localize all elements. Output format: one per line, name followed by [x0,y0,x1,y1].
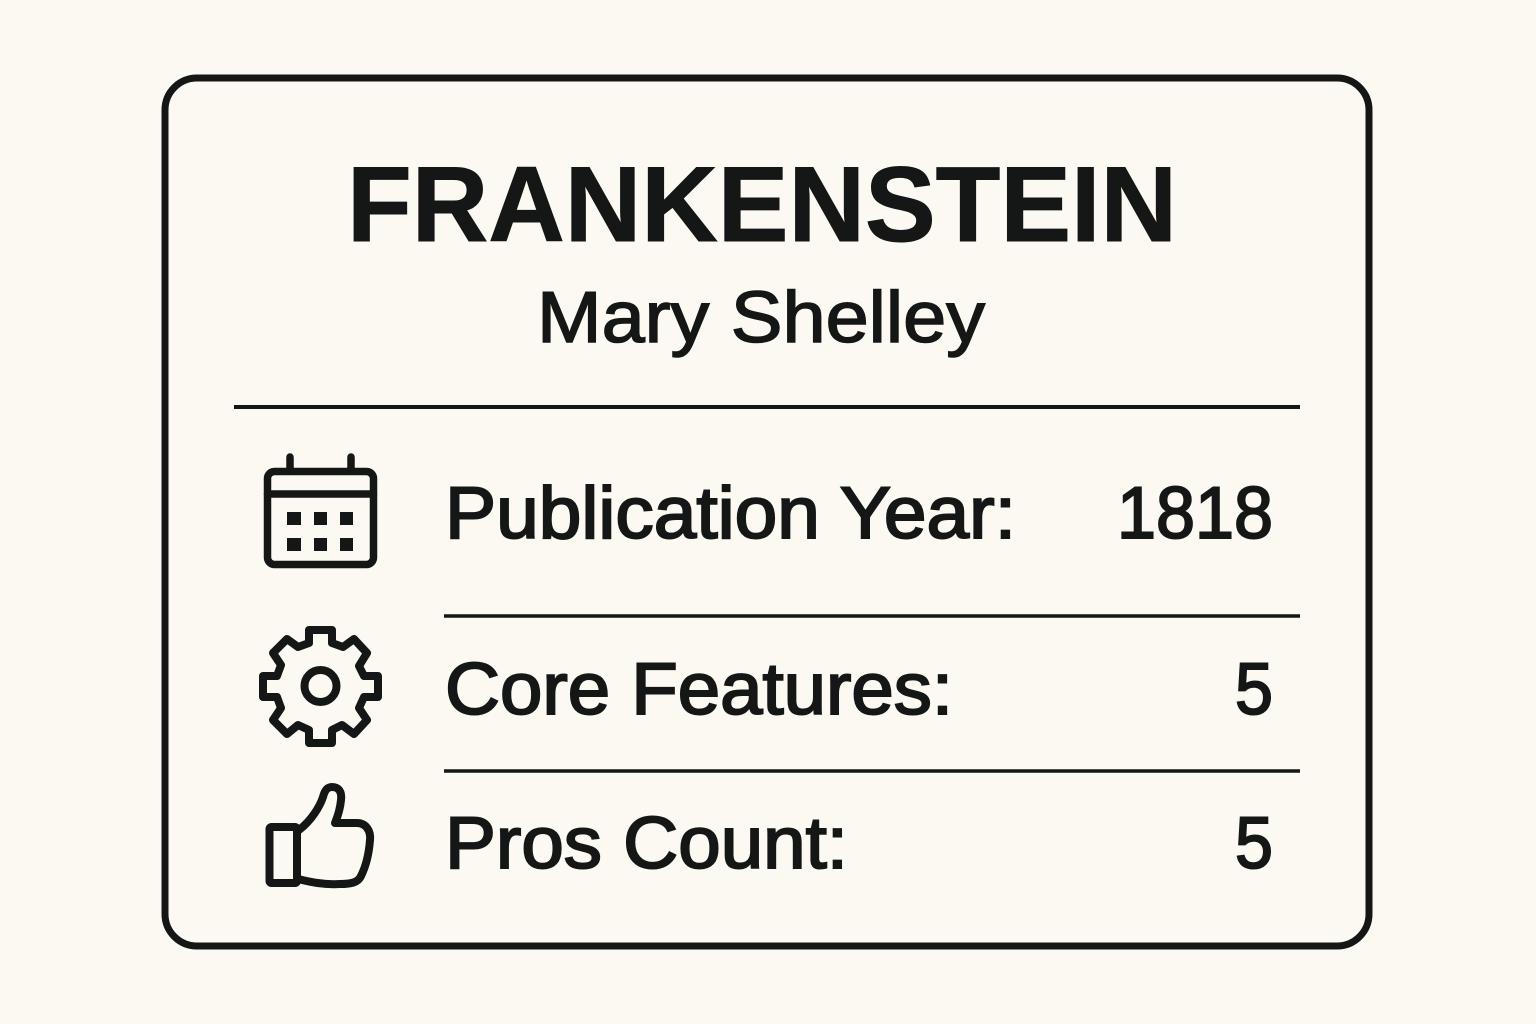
row: publication year value: 1818 [1117,473,1273,554]
title: FRANKENSTEIN [347,144,1177,264]
author: Mary Shelley [537,278,985,358]
icon: gear [263,630,378,743]
row: pros count label: Pros Count: [445,803,848,884]
panel: card border [165,78,1369,946]
icon: calendar [268,457,374,564]
row: pros count value: 5 [1235,803,1273,884]
row: publication year label: Publication Year: [445,473,1016,554]
icon: thumbs up [270,787,370,884]
row: core features value: 5 [1235,649,1273,730]
row: core features label: Core Features: [445,649,953,730]
